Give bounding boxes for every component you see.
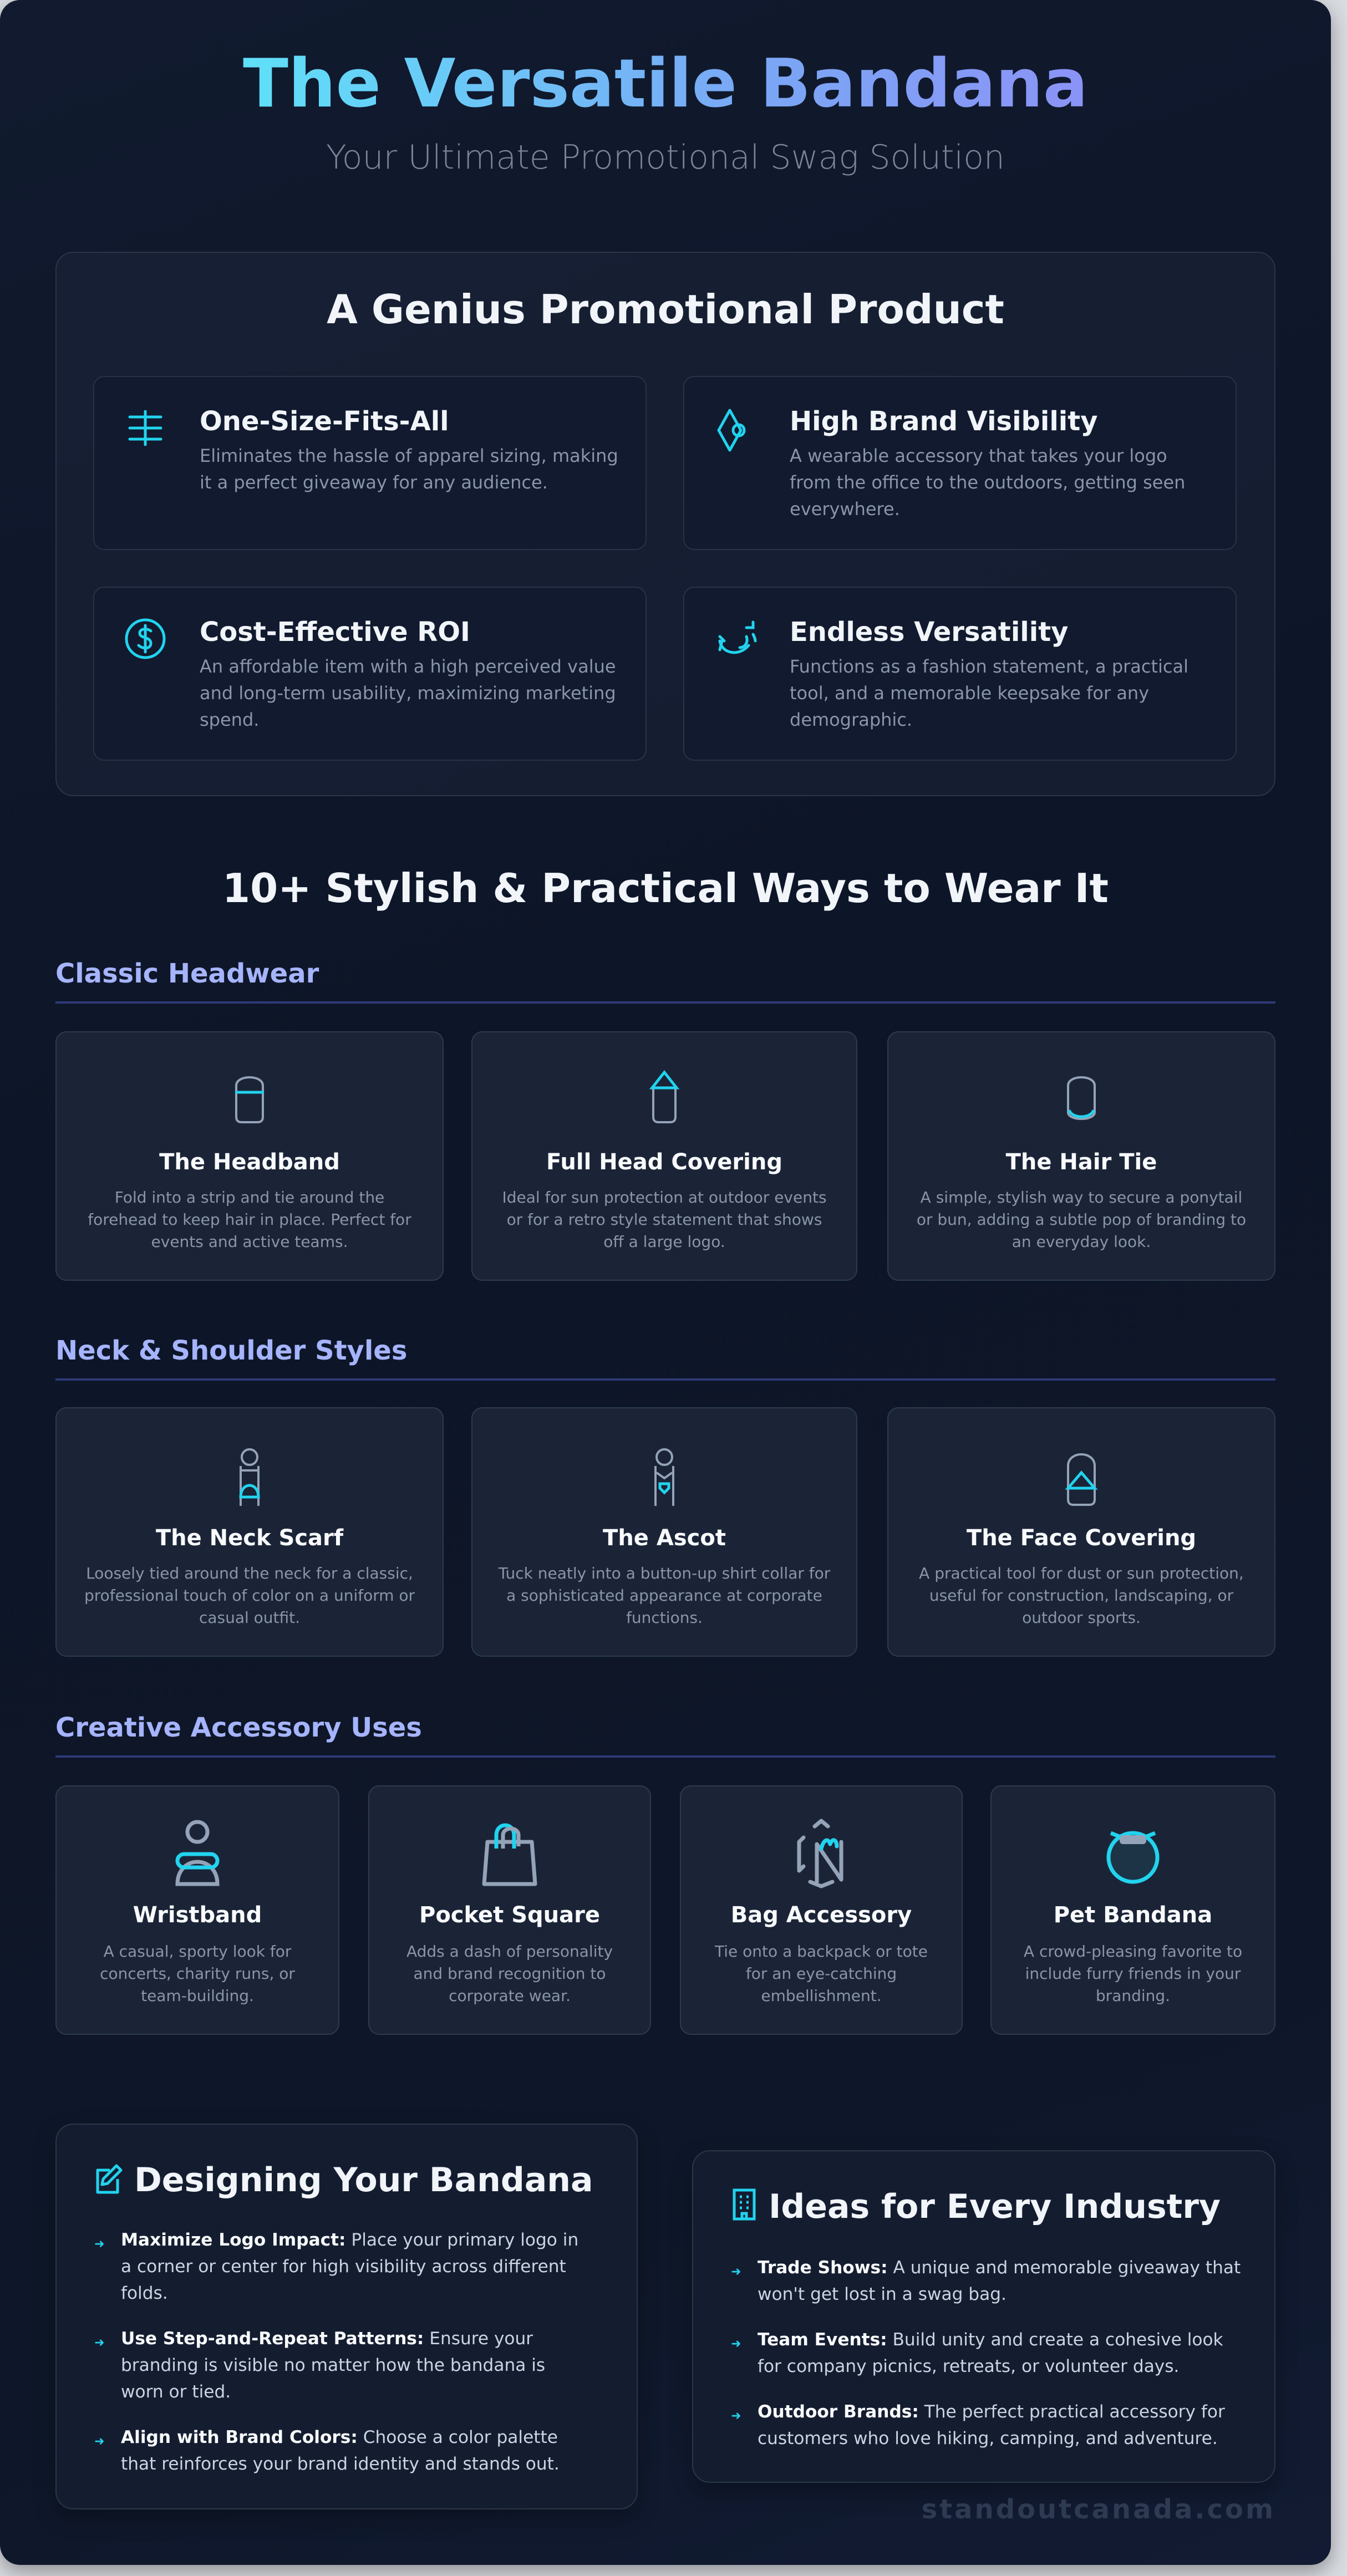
feature: cost: Cost-Effective ROI (200, 617, 470, 648)
card: pet bandana: A crowd-pleasing favorite to include furry friends in your branding. (1024, 1942, 1242, 2005)
icon: neck scarf (240, 1448, 260, 1506)
footer brand: standoutcanada.com (922, 2494, 1275, 2525)
subtitle: Your Ultimate Promotional Swag Solution (326, 138, 1005, 177)
section heading: 10+ Stylish & Practical Ways to Wear It (222, 865, 1109, 912)
card: pet bandana: Pet Bandana (1054, 1902, 1212, 1928)
subheading: classic headwear: Classic Headwear (55, 958, 319, 989)
list: industries: Team Events: Build unity and create a cohesive look for company picnics, retreats, or volunteer days. (758, 2330, 1223, 2376)
icon: bag (482, 1823, 537, 1886)
panel: designing (55, 2124, 638, 2509)
card: wristband: A casual, sporty look for concerts, charity runs, or team‑building. (100, 1942, 295, 2005)
subheading: classic headwear (55, 957, 1275, 1004)
card: full head covering (471, 1031, 857, 1281)
list: design tips: Use Step-and-Repeat Patterns: Ensure your branding is visible no matter how the bandana is worn or tied. (121, 2329, 545, 2402)
card: full head covering: Ideal for sun protection at outdoor events or for a retro style statement that shows off a large logo. (502, 1188, 827, 1251)
card: hair tie (887, 1031, 1275, 1281)
card: face covering: The Face Covering (967, 1525, 1196, 1551)
feature: visibility: High Brand Visibility (790, 406, 1098, 437)
icon: refresh (719, 621, 756, 654)
card: face covering: A practical tool for dust or sun protection, useful for construction, landscaping, or outdoor sports. (919, 1564, 1244, 1627)
feature: one size: One-Size-Fits-All (200, 406, 449, 437)
list: industries (731, 2258, 1241, 2448)
card: wristband: Wristband (133, 1902, 262, 1928)
card: headband (55, 1031, 444, 1281)
heading: designing: Designing Your Bandana (134, 2161, 593, 2200)
card: bag accessory: Bag Accessory (731, 1902, 912, 1928)
feature: cost (93, 587, 647, 761)
card: bag accessory: Tie onto a backpack or tote for an eye-catching embellishment. (715, 1942, 928, 2005)
card: ascot: The Ascot (603, 1525, 726, 1551)
card: ascot: Tuck neatly into a button-up shirt collar for a sophisticated appearance at corporate functions. (499, 1564, 830, 1627)
feature: one size (93, 376, 647, 550)
icon: headband (235, 1076, 264, 1123)
subheading: neck (55, 1334, 1275, 1381)
feature: versatility: Endless Versatility (790, 617, 1068, 648)
panel: genius promotional product (55, 252, 1275, 796)
subheading: creative (55, 1711, 1275, 1758)
card: neck scarf: The Neck Scarf (156, 1525, 343, 1551)
card: hair tie: A simple, stylish way to secure a ponytail or bun, adding a subtle pop of branding to an everyday look. (917, 1188, 1246, 1251)
title: The Versatile Bandana (243, 45, 1088, 123)
card: headband: The Headband (159, 1149, 340, 1175)
panel heading: A Genius Promotional Product (327, 286, 1004, 333)
icon: hair tie (1067, 1076, 1096, 1120)
feature: one size: Eliminates the hassle of apparel sizing, making it a perfect giveaway for any audience. (200, 445, 618, 493)
card: headband: Fold into a strip and tie around the forehead to keep hair in place. Perfect for events and active teams. (88, 1188, 411, 1251)
feature: versatility: Functions as a fashion statement, a practical tool, and a memorable keepsake for any demographic. (790, 656, 1188, 730)
subheading: neck: Neck & Shoulder Styles (55, 1335, 407, 1366)
icon: bag accessory (797, 1819, 843, 1888)
card: pocket square: Adds a dash of personality and brand recognition to corporate wear. (406, 1942, 613, 2005)
subheading: creative: Creative Accessory Uses (55, 1712, 422, 1743)
list: industries: Trade Shows: A unique and memorable giveaway that won't get lost in a swag bag. (758, 2258, 1241, 2304)
list: design tips (95, 2230, 578, 2474)
icon: dollar (125, 619, 165, 659)
icon: sizing lines (129, 410, 162, 446)
card: full head covering: Full Head Covering (546, 1149, 782, 1175)
feature: visibility: A wearable accessory that takes your logo from the office to the outdoors, getting seen everywhere. (790, 445, 1185, 520)
list: design tips: Maximize Logo Impact: Place your primary logo in a corner or center for high visibility across different folds. (121, 2230, 578, 2303)
icon: pet (1107, 1831, 1159, 1884)
feature: versatility (683, 587, 1237, 761)
panel: industries (692, 2150, 1275, 2483)
card: hair tie: The Hair Tie (1006, 1149, 1157, 1175)
feature: visibility (683, 376, 1237, 550)
icon: wristband (175, 1820, 220, 1886)
card: bag accessory (680, 1785, 963, 2035)
feature: cost: An affordable item with a high perceived value and long-term usability, maximizing marketing spend. (200, 656, 616, 730)
list: industries: Outdoor Brands: The perfect practical accessory for customers who love hiking, camping, and adventure. (758, 2402, 1225, 2448)
card: pocket square (368, 1785, 651, 2035)
card: neck scarf (55, 1407, 444, 1657)
card: pocket square: Pocket Square (419, 1902, 600, 1928)
card: wristband (55, 1785, 339, 2035)
heading: industries: Ideas for Every Industry (769, 2187, 1221, 2226)
card: ascot (471, 1407, 857, 1657)
icon: head covering (649, 1070, 679, 1123)
card: pet bandana (990, 1785, 1275, 2035)
icon: face covering (1065, 1453, 1098, 1506)
card: face covering (887, 1407, 1275, 1657)
card: neck scarf: Loosely tied around the neck for a classic, professional touch of color on a uniform or casual outfit. (84, 1564, 415, 1627)
icon: diamond eye (718, 409, 745, 451)
list: design tips: Align with Brand Colors: Choose a color palette that reinforces your brand identity and stands out. (121, 2427, 560, 2474)
icon: ascot (654, 1448, 674, 1506)
